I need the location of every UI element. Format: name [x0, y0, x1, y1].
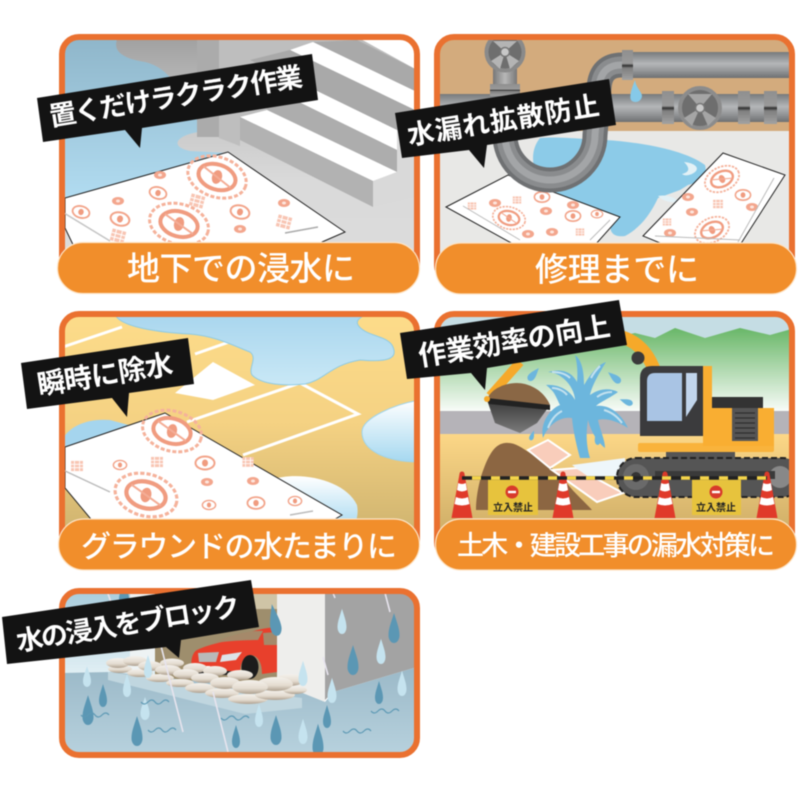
U-shaped leaking pipe	[505, 65, 622, 180]
caption pill: 修理までに	[535, 251, 699, 288]
water highlights	[658, 162, 697, 202]
panel: ground puddles	[21, 314, 420, 570]
hills	[437, 328, 795, 415]
excavator body	[638, 366, 774, 452]
staircase	[240, 37, 420, 207]
ground	[439, 434, 790, 529]
right mat	[643, 153, 785, 248]
field lines	[60, 327, 358, 455]
water pool	[64, 40, 223, 198]
panel frame	[437, 37, 792, 282]
panel: repairs	[395, 34, 796, 294]
barrier rope	[462, 476, 767, 480]
callout label	[2, 580, 259, 664]
water ripples	[81, 700, 399, 733]
caption pill	[58, 519, 420, 570]
caption pill: グラウンドの水たまりに	[81, 531, 397, 564]
caption pill	[436, 243, 796, 294]
left building wall	[130, 591, 156, 671]
caption pill	[58, 242, 420, 294]
absorbent mat	[64, 150, 346, 245]
panel: block water intrusion	[2, 580, 417, 760]
water puddle	[533, 137, 706, 236]
panel: civil engineering	[400, 300, 800, 570]
callout label	[400, 300, 627, 390]
callout label: 水漏れ拡散防止	[405, 91, 602, 151]
garage interior	[155, 591, 277, 681]
bucket	[484, 383, 550, 433]
sign: no entry: 立入禁止	[493, 501, 533, 514]
warning cones	[452, 472, 778, 518]
red car	[191, 627, 277, 679]
absorbent mat	[64, 408, 344, 520]
scene: sports ground and mat	[64, 316, 415, 528]
sign: no entry	[692, 477, 741, 515]
excavator arm	[490, 336, 655, 396]
panel frame	[62, 314, 417, 559]
callout label	[21, 338, 194, 417]
callout label: 水の浸入をブロック	[14, 591, 242, 657]
scene: pipes and spreading water	[439, 39, 790, 252]
rope yellow stripes	[462, 476, 767, 480]
callout label: 置くだけラクラク作業	[47, 62, 305, 132]
sign: no entry: 立入禁止	[696, 501, 736, 514]
crawler track	[617, 452, 800, 497]
callout label	[37, 54, 318, 148]
top puddle	[115, 314, 394, 385]
flood water	[62, 667, 417, 760]
callout label: 作業効率の向上	[416, 311, 613, 372]
flange	[622, 50, 633, 80]
panel frame	[437, 314, 792, 559]
sandbag barrier	[106, 656, 307, 714]
rain streaks	[107, 591, 390, 752]
callout label	[395, 79, 616, 168]
water droplets	[526, 366, 634, 445]
pipe flanges	[662, 91, 777, 124]
left mat	[446, 175, 620, 245]
concrete pillar	[196, 40, 398, 146]
scene: garage, car and flood	[62, 582, 417, 760]
scene: stairs, water and mat	[64, 39, 414, 251]
dirt mound	[476, 443, 592, 510]
light raindrops	[83, 609, 406, 744]
white wall	[277, 591, 325, 702]
buried mats	[528, 440, 623, 502]
right valve	[680, 88, 720, 128]
panel frame	[62, 591, 417, 755]
scene: excavator and water leak	[439, 316, 790, 529]
lower right puddle	[278, 476, 358, 519]
left puddle	[64, 419, 128, 447]
falling water drop	[630, 80, 642, 102]
water fountain	[542, 355, 628, 458]
lower pipe	[437, 94, 792, 122]
caption pill	[436, 519, 796, 570]
caption pill: 地下での浸水に	[127, 250, 355, 287]
gray wall	[325, 591, 417, 700]
sign: no entry	[488, 477, 538, 515]
arm pivot	[632, 352, 644, 364]
upper pipe	[630, 52, 795, 78]
callout label: 瞬時に除水	[35, 349, 175, 401]
caption pill: 土木・建設工事の漏水対策に	[457, 531, 775, 561]
dark raindrops	[82, 582, 400, 756]
panel frame	[62, 37, 417, 282]
right puddle	[362, 400, 420, 462]
base diamond	[175, 362, 255, 400]
left valve	[486, 34, 524, 96]
water channel	[572, 458, 625, 480]
retaining wall	[437, 411, 792, 435]
panel: underground flooding	[37, 37, 420, 294]
